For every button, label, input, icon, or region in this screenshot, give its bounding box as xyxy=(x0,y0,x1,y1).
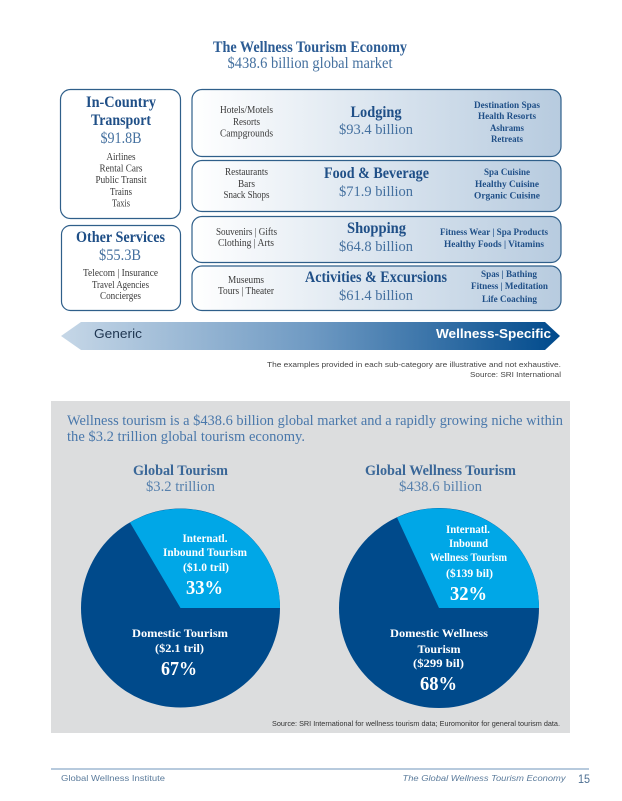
panel: shopping: Healthy Foods | Vitamins xyxy=(444,240,544,250)
panel: activities and excursions: Life Coaching xyxy=(482,295,537,305)
pie chart: global wellness tourism xyxy=(339,508,539,708)
panel: in-country transport: Airlines xyxy=(106,152,136,163)
panel: food and beverage: Snack Shops xyxy=(224,190,270,201)
panel: lodging xyxy=(192,90,561,156)
heading: global tourism: $3.2 trillion xyxy=(146,479,216,495)
pie chart: global tourism: ($1.0 tril) xyxy=(183,561,229,574)
panel: in-country transport: In-Country xyxy=(86,94,156,111)
panel: lodging: Destination Spas xyxy=(474,101,540,111)
panel: food and beverage: Spa Cuisine xyxy=(484,168,530,178)
pie chart: global tourism: ($2.1 tril) xyxy=(155,642,204,655)
pie chart: global wellness tourism: ($139 bil) xyxy=(446,567,493,580)
panel: shopping: Fitness Wear | Spa Products xyxy=(440,228,548,238)
pie chart: global wellness tourism: Domestic Wellness xyxy=(390,628,489,640)
pie chart: global tourism: Domestic Tourism xyxy=(132,628,228,640)
pie chart: global tourism: 33% xyxy=(186,577,223,599)
footnote: The examples provided in each sub-category are illustrative and not exhaustive. xyxy=(267,360,561,369)
panel: lodging: Ashrams xyxy=(490,124,524,134)
panel heading xyxy=(67,413,563,445)
pie chart: global wellness tourism: Inbound xyxy=(449,538,489,550)
footnote xyxy=(267,360,561,379)
pie chart: global wellness tourism: Wellness Tourism xyxy=(430,552,507,564)
panel: lodging: $93.4 billion xyxy=(339,122,413,138)
pie chart: global tourism xyxy=(81,508,280,708)
panel: lodging: Lodging xyxy=(350,104,402,121)
panel: in-country transport: Public Transit xyxy=(96,175,147,186)
panel: shopping: Souvenirs | Gifts xyxy=(216,227,277,238)
panel: other services: Telecom | Insurance xyxy=(83,268,159,279)
pie chart: global wellness tourism: ($299 bil) xyxy=(413,657,464,670)
panel: other services: $55.3B xyxy=(99,247,141,264)
panel: other services: Travel Agencies xyxy=(92,280,149,291)
title: The Wellness Tourism Economy xyxy=(213,39,407,56)
pie chart: global wellness tourism: 32% xyxy=(450,583,487,605)
pie chart: global wellness tourism: 68% xyxy=(420,673,457,695)
title xyxy=(213,39,407,72)
footer: The Global Wellness Tourism Economy xyxy=(402,773,566,783)
panel: other services: Other Services xyxy=(76,229,165,246)
arrow: generic to wellness-specific: Wellness-Specific xyxy=(436,326,551,341)
pie chart: global wellness tourism: Internatl. xyxy=(446,524,490,536)
title: $438.6 billion global market xyxy=(228,55,393,72)
panel: in-country transport xyxy=(60,90,180,218)
panel: activities and excursions: Tours | Theater xyxy=(218,286,275,297)
footer xyxy=(51,769,590,786)
heading: global tourism xyxy=(133,463,228,495)
footer: 15 xyxy=(578,772,590,786)
panel: shopping: Clothing | Arts xyxy=(218,238,274,249)
panel: activities and excursions: Spas | Bathing xyxy=(481,270,537,280)
panel: activities and excursions: Fitness | Meditation xyxy=(471,282,549,292)
footnote: Source: SRI International xyxy=(470,370,561,379)
panel: activities and excursions: Activities & Excursions xyxy=(305,269,447,286)
pie chart: global tourism: Internatl. xyxy=(182,533,228,545)
panel: activities and excursions xyxy=(192,266,561,310)
panel: food and beverage: Healthy Cuisine xyxy=(475,180,539,190)
panel: shopping: Shopping xyxy=(347,220,406,237)
panel: lodging: Resorts xyxy=(233,117,260,128)
panel: food and beverage: Organic Cuisine xyxy=(474,192,540,202)
panel: in-country transport: Taxis xyxy=(112,198,130,210)
panel: food and beverage: Restaurants xyxy=(225,167,268,178)
heading: global wellness tourism: $438.6 billion xyxy=(399,479,483,495)
panel: food and beverage xyxy=(192,160,561,212)
arrow: generic to wellness-specific: Generic xyxy=(94,326,143,341)
panel: food and beverage: Bars xyxy=(238,179,255,190)
panel heading: the $3.2 trillion global tourism economy. xyxy=(67,429,305,445)
source note: Source: SRI International for wellness tourism data; Euromonitor for general tourism data. xyxy=(272,719,560,728)
panel: food and beverage: $71.9 billion xyxy=(339,184,413,200)
panel: lodging: Health Resorts xyxy=(478,112,536,122)
pie chart: global tourism: 67% xyxy=(161,658,197,680)
panel: lodging: Hotels/Motels xyxy=(220,105,273,116)
heading: global tourism: Global Tourism xyxy=(133,463,228,479)
panel: lodging: Retreats xyxy=(491,135,523,145)
panel: shopping: $64.8 billion xyxy=(339,239,413,255)
heading: global wellness tourism: Global Wellness Tourism xyxy=(365,463,516,479)
panel: in-country transport: Transport xyxy=(91,112,152,129)
arrow: generic to wellness-specific xyxy=(61,322,560,350)
panel: in-country transport: Trains xyxy=(110,187,132,198)
panel: global comparison xyxy=(51,401,570,733)
pie chart: global wellness tourism: Tourism xyxy=(418,644,461,656)
footer: Global Wellness Institute xyxy=(61,773,165,783)
panel: in-country transport: $91.8B xyxy=(100,130,142,147)
panel: shopping xyxy=(192,216,561,262)
panel: in-country transport: Rental Cars xyxy=(100,164,143,174)
panel: other services xyxy=(62,226,180,310)
panel: other services: Concierges xyxy=(100,291,141,302)
panel heading: Wellness tourism is a $438.6 billion global market and a rapidly growing niche within xyxy=(67,413,563,429)
pie chart: global tourism: Inbound Tourism xyxy=(163,547,247,559)
panel: lodging: Campgrounds xyxy=(220,128,273,140)
panel: activities and excursions: $61.4 billion xyxy=(339,288,413,304)
heading: global wellness tourism xyxy=(365,463,516,495)
panel: food and beverage: Food & Beverage xyxy=(324,165,429,182)
panel: activities and excursions: Museums xyxy=(228,275,264,286)
